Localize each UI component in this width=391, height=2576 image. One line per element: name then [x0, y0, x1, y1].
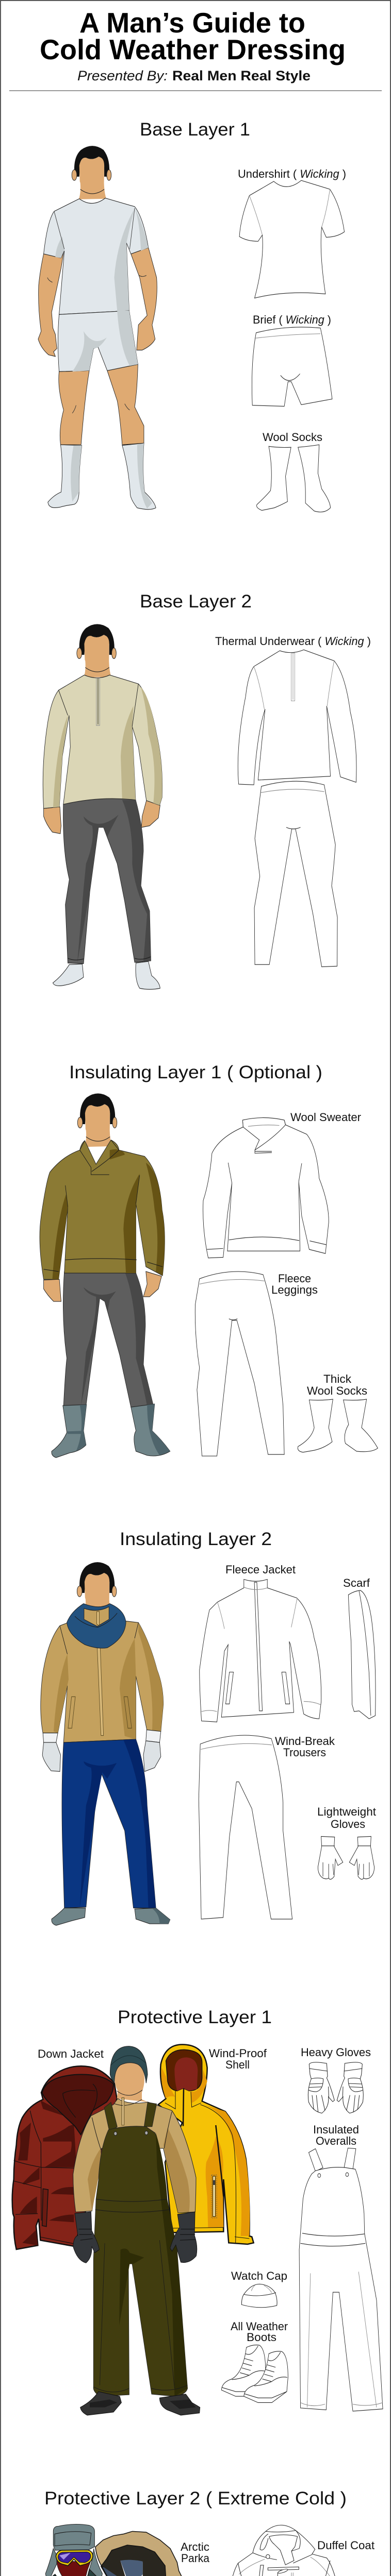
garment: fleece jacket [200, 1563, 321, 1722]
garment: thermal underwear: Thermal Underwear ( Wicking ) [215, 635, 371, 648]
garment: yellow wind-proof shell: Wind-Proof [209, 2047, 267, 2060]
heading: base layer 1: Base Layer 1 [140, 120, 250, 140]
figure: man in insulating layer 1 [40, 1093, 170, 1458]
section: base layer 1 [38, 120, 346, 512]
section: protective layer 2 [12, 2488, 382, 2576]
garment: thick wool socks: Wool Socks [307, 1384, 367, 1397]
garment: lightweight gloves: Gloves [331, 1818, 365, 1831]
garment: wool sweater: Wool Sweater [290, 1111, 361, 1124]
heading: insulating layer 1: Insulating Layer 1 ( Optional ) [69, 1062, 322, 1082]
garment: all weather boots: All Weather [231, 2320, 288, 2333]
garment: scarf: Scarf [343, 1577, 370, 1589]
garment: wool socks [257, 431, 331, 512]
subtitle: Presented By: [77, 68, 168, 83]
garment: insulated overalls [299, 2123, 383, 2411]
garment: undershirt: Undershirt ( Wicking ) [238, 167, 346, 180]
title [40, 7, 346, 65]
figure: man in base layer 1 [38, 146, 157, 510]
figure: man in base layer 2 [43, 624, 162, 989]
figure: man in protective layer 1 [73, 2046, 200, 2415]
garment: arctic parka: Arctic [181, 2540, 209, 2553]
garment: arctic parka [95, 2531, 210, 2576]
garment: all weather boots [221, 2320, 288, 2402]
garment: insulated overalls: Overalls [316, 2134, 356, 2147]
garment: wind-break trousers: Wind-Break [275, 1735, 335, 1748]
garment: arctic parka: Parka [181, 2552, 210, 2565]
garment: thick wool socks [298, 1372, 378, 1452]
garment: red down jacket [12, 2047, 117, 2249]
garment: red down jacket: Down Jacket [38, 2047, 104, 2060]
garment: watch cap [231, 2269, 287, 2308]
garment: lightweight gloves [317, 1805, 376, 1879]
heading: insulating layer 2: Insulating Layer 2 [120, 1529, 272, 1549]
garment: heavy gloves [301, 2046, 371, 2113]
heading: base layer 2: Base Layer 2 [140, 591, 252, 612]
section: insulating layer 2 [41, 1529, 376, 1925]
subtitle: Real Men Real Style [172, 68, 311, 83]
section: protective layer 1 [12, 2007, 383, 2415]
garment: thermal underwear [215, 635, 371, 967]
title: Cold Weather Dressing [40, 33, 346, 65]
garment: yellow wind-proof shell [158, 2044, 267, 2244]
garment: yellow wind-proof shell: Shell [225, 2058, 250, 2071]
garment: wool sweater [203, 1111, 361, 1258]
garment: thick wool socks: Thick [323, 1372, 352, 1385]
garment: wool socks: Wool Socks [263, 431, 322, 444]
garment: watch cap: Watch Cap [231, 2269, 287, 2282]
garment: insulated overalls: Insulated [313, 2123, 359, 2136]
figure: man in insulating layer 2 [41, 1562, 170, 1925]
heading: protective layer 1: Protective Layer 1 [118, 2007, 272, 2027]
garment: fleece leggings: Leggings [271, 1283, 318, 1296]
heading: protective layer 2: Protective Layer 2 ( Extreme Cold ) [44, 2488, 347, 2509]
title: A Man’s Guide to [79, 7, 305, 39]
garment: fleece leggings [195, 1272, 318, 1456]
garment: fleece jacket: Fleece Jacket [225, 1563, 296, 1576]
subtitle [77, 68, 311, 83]
garment: duffel coat [222, 2525, 374, 2576]
figure: man in protective layer 2 [12, 2524, 144, 2576]
garment: fleece leggings: Fleece [278, 1272, 311, 1285]
garment: all weather boots: Boots [247, 2331, 276, 2344]
garment: duffel coat: Duffel Coat [317, 2539, 374, 2552]
garment: wind-break trousers: Trousers [283, 1746, 326, 1759]
garment: lightweight gloves: Lightweight [317, 1805, 376, 1818]
section: insulating layer 1 [40, 1062, 378, 1458]
garment: heavy gloves: Heavy Gloves [301, 2046, 371, 2059]
section: base layer 2 [43, 591, 371, 989]
garment: undershirt [238, 167, 346, 298]
garment: scarf [343, 1577, 376, 1719]
garment: wind-break trousers [199, 1735, 335, 1919]
garment: brief [252, 313, 332, 406]
garment: brief: Brief ( Wicking ) [253, 313, 331, 326]
